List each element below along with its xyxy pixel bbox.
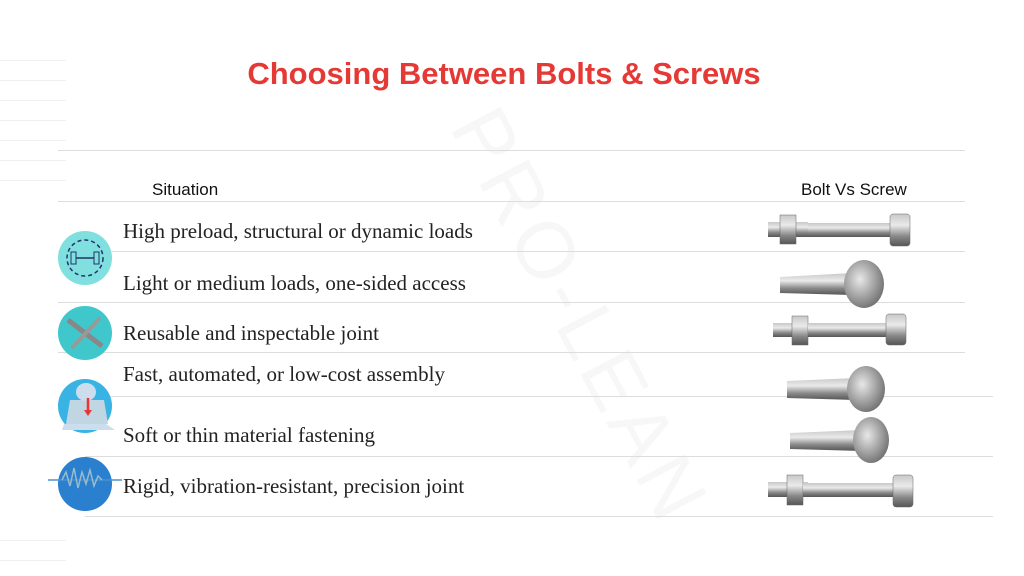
icon: vibration — [48, 457, 122, 511]
watermark: PRO-LEAN — [434, 93, 727, 538]
row 4: Fast, automated, or low-cost assembly — [123, 362, 445, 386]
icon: cross bolts — [58, 306, 112, 360]
row 3: Reusable and inspectable joint — [123, 321, 379, 345]
bolt 3 — [768, 475, 913, 507]
row 5: Soft or thin material fastening — [123, 423, 375, 447]
bolt 1 — [768, 214, 910, 246]
row 2: Light or medium loads, one-sided access — [123, 271, 466, 295]
screw 2 — [787, 366, 885, 412]
row 6: Rigid, vibration-resistant, precision joint — [123, 474, 464, 498]
header: situation: Situation — [152, 180, 218, 199]
icon: gear dumbbell — [58, 231, 112, 285]
bolt 2 — [773, 314, 906, 345]
screw 1 — [780, 260, 884, 308]
icon: soft material — [58, 379, 115, 433]
title: Choosing Between Bolts & Screws — [247, 56, 761, 91]
screw 3 — [790, 417, 889, 463]
header: bolt vs screw: Bolt Vs Screw — [801, 180, 907, 199]
row texts: High preload, structural or dynamic loads — [123, 219, 473, 243]
